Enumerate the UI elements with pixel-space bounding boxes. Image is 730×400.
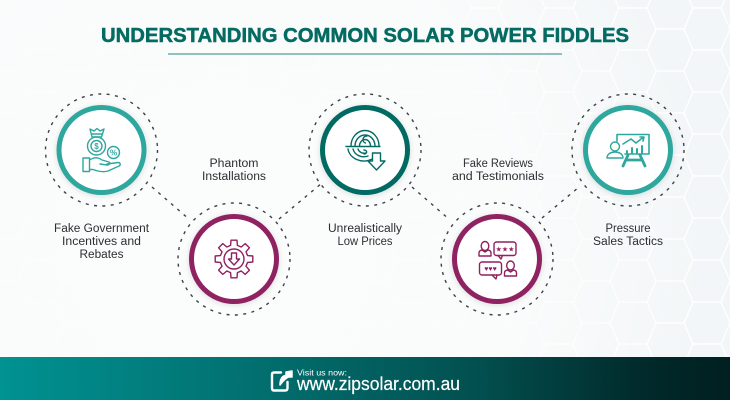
label: fake government [54, 223, 150, 261]
label: fake reviews and testimonials [452, 158, 544, 183]
label: pressure sales tactics [593, 223, 663, 248]
panel: pressure sales tactics [572, 94, 684, 248]
connector: step 3 to step 4 [412, 187, 450, 220]
icon: reviewers with speech bubbles [479, 242, 516, 279]
label: pressure sales tactics: Sales Tactics [593, 236, 663, 248]
connector: step 2 to step 3 [279, 183, 322, 219]
label: unrealistically low prices: Unrealistically [328, 223, 402, 235]
label: unrealistically low prices: Low Prices [338, 236, 393, 248]
label: phantom installations [202, 158, 266, 183]
label: pressure sales tactics: Pressure [606, 223, 650, 235]
label: fake government: Incentives and [62, 236, 141, 248]
footer band [0, 357, 730, 400]
visit us now text: Visit us now: [297, 368, 347, 378]
icon: money bag and hand [83, 128, 120, 172]
label: fake government: Fake Government [54, 223, 150, 235]
title: UNDERSTANDING COMMON SOLAR POWER FIDDLES [101, 25, 629, 47]
label: phantom installations: Installations [202, 171, 266, 183]
panel: unrealistically low prices [309, 94, 421, 248]
icon: money bag and hand: % [110, 148, 117, 158]
label: fake reviews and testimonials: Fake Reviews [463, 158, 533, 170]
icon: external link [272, 371, 292, 390]
label: phantom installations: Phantom [210, 158, 258, 170]
icon: reviewers with speech bubbles: ★★★ [496, 246, 514, 254]
icon: reviewers with speech bubbles: ♥♥♥ [484, 266, 497, 273]
label: fake reviews and testimonials: and Testimonials [452, 171, 544, 183]
label: unrealistically low prices [328, 223, 402, 248]
icon: money bag and hand: $ [94, 142, 99, 151]
title underline [168, 53, 562, 55]
icon: presenter with chart board [607, 134, 649, 166]
website url: www.zipsolar.com.au [296, 374, 460, 394]
panel: fake reviews [441, 158, 553, 315]
connector: step 1 to step 2 [152, 187, 190, 220]
icon: gear with down arrow [215, 240, 253, 278]
label: fake government: Rebates [80, 249, 124, 261]
connector: step 4 to step 5 [542, 187, 579, 218]
panel: phantom installations [178, 158, 290, 315]
icon: split dollar coin with down arrow [346, 130, 385, 170]
panel: fake government incentives [46, 94, 158, 261]
